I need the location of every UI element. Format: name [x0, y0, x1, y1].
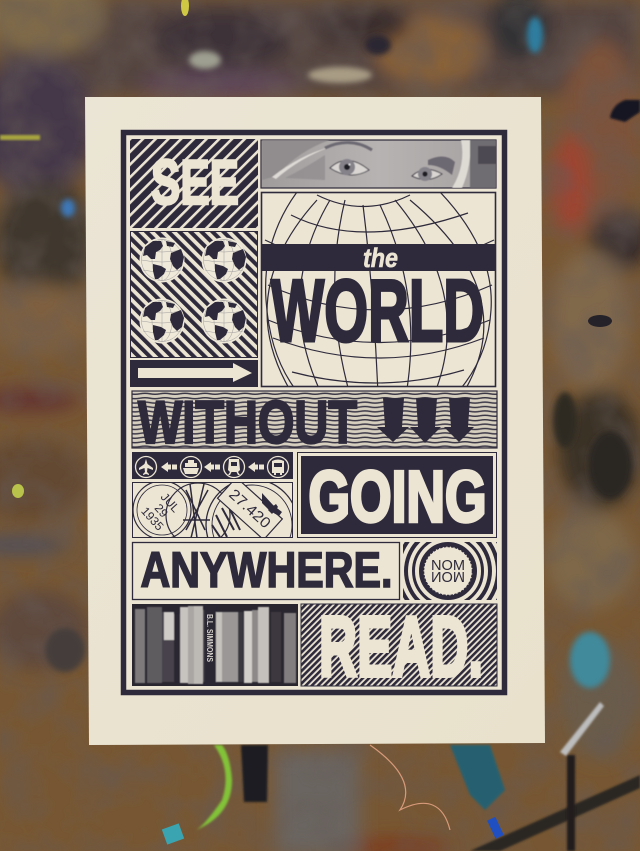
panel: READ.: [301, 600, 497, 695]
panel: WITHOUT: [132, 389, 497, 456]
arrow: down 1: [377, 398, 409, 442]
arrow: down 2: [410, 398, 441, 443]
text: NOM: NOM: [431, 557, 465, 574]
icon: left arrow: [161, 462, 177, 472]
text: NOM mirrored: NOM: [431, 568, 465, 585]
panel: bookshelf photo: [132, 604, 298, 686]
icon: globe bottom left: [140, 298, 184, 344]
icon: globe top left: [140, 238, 184, 282]
poster frame: [124, 132, 504, 692]
heading: GOING: GOING: [308, 458, 486, 538]
heading: WORLD: WORLD: [271, 261, 484, 360]
panel: transport icons: [132, 452, 293, 479]
heading: ANYWHERE.: ANYWHERE.: [140, 542, 392, 598]
panel: four globes: [130, 232, 258, 358]
stamp: large circle: [205, 483, 292, 537]
arrow: down 3: [444, 398, 474, 442]
icon: left arrow: [204, 462, 220, 472]
heading: SEE: SEE: [151, 148, 239, 218]
stamp: number box: [216, 483, 284, 537]
panel: wireframe globe with the WORLD: [262, 192, 496, 395]
panel: right arrow: [130, 360, 258, 387]
band: the: [262, 244, 495, 271]
globe wireframe: [265, 192, 494, 395]
icon: globe top right: [202, 238, 246, 282]
stamp: date circle: 29: [152, 501, 171, 521]
stamp: date circle: [133, 481, 191, 539]
panel: NOM NOM badge: [403, 542, 497, 600]
panel: eyes photo: [261, 140, 496, 188]
panel: ANYWHERE.: [132, 542, 400, 600]
stamp: number box: 27.420: [225, 486, 274, 532]
icon: train: [224, 456, 244, 478]
poster paper sheet: [85, 97, 545, 745]
icon: bus: [268, 456, 288, 478]
stamp: airplane circle: [165, 483, 231, 537]
stamp: small plane: [262, 493, 282, 516]
panel: GOING: [298, 452, 496, 538]
heading: READ.: READ.: [319, 600, 483, 695]
icon: plane: [136, 456, 156, 478]
arrow: right: [138, 363, 252, 382]
heading: WITHOUT: WITHOUT: [138, 389, 357, 456]
panel: passport stamps: [132, 482, 293, 538]
icon: globe bottom right: [202, 298, 246, 344]
badge centre: [424, 546, 472, 596]
icon: left arrow: [248, 462, 264, 472]
stamp: date circle: JUL: [158, 490, 183, 515]
panel: SEE: [130, 139, 258, 228]
text: the: the: [363, 243, 398, 273]
stamp: date circle: 1935: [138, 504, 167, 534]
text: book spine: B.L. SIMMONS: [205, 614, 214, 663]
icon: ship: [180, 456, 202, 478]
